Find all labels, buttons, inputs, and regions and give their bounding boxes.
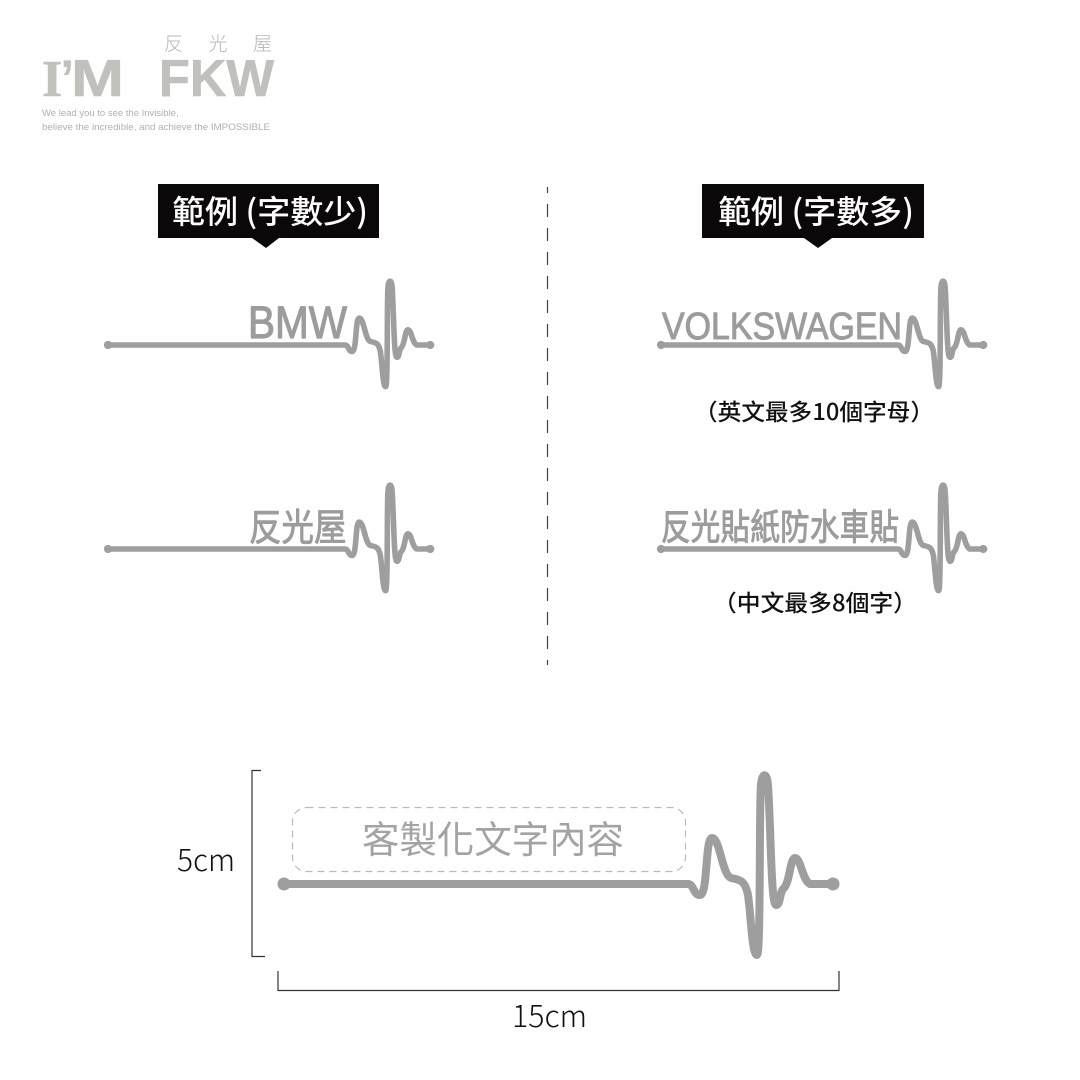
heading tag: many characters — [702, 184, 924, 248]
custom text 反光貼紙防水車貼: 反光貼紙防水車貼 — [661, 499, 899, 550]
logo wordmark FKW: FKW — [159, 50, 275, 108]
custom text placeholder: 客製化文字內容 — [362, 809, 624, 864]
center dashed divider — [546, 187, 548, 665]
custom text VOLKSWAGEN: VOLKSWAGEN — [662, 306, 902, 348]
heartbeat line — [104, 281, 434, 387]
example sticker: BMW — [104, 281, 434, 387]
heartbeat line — [657, 485, 987, 591]
width bracket — [278, 971, 839, 990]
large heartbeat line — [278, 775, 840, 955]
height bracket — [252, 770, 265, 956]
example sticker: 反光貼紙防水車貼 — [657, 485, 987, 591]
height label 5cm: 5cm — [177, 836, 235, 880]
logo letter I: I — [42, 51, 62, 108]
caption: English limit: （英文最多10個字母） — [694, 393, 934, 427]
heading tag: few characters: 範例 (字數少) — [172, 187, 368, 233]
size diagram — [177, 770, 840, 1036]
logo tagline: believe the incredible, and achieve the IMPOSSIBLE — [42, 122, 270, 133]
custom text BMW: BMW — [248, 297, 347, 348]
custom text 反光屋: 反光屋 — [249, 498, 346, 552]
logo: I'M FKW — [42, 29, 298, 133]
dashed text area — [292, 808, 686, 872]
width label 15cm: 15cm — [512, 992, 587, 1036]
logo chinese name: 反光屋 — [164, 29, 298, 56]
logo tagline: We lead you to see the Invisible, — [42, 108, 179, 119]
caption: Chinese limit: （中文最多8個字） — [713, 584, 917, 618]
example sticker: 反光屋 — [104, 485, 434, 591]
heading tag: many characters: 範例 (字數多) — [718, 187, 914, 233]
heading tag: few characters — [158, 184, 379, 248]
example sticker: VOLKSWAGEN — [657, 281, 987, 387]
logo letter M: M — [71, 50, 124, 108]
heartbeat line — [657, 281, 987, 387]
logo apostrophe: ’ — [60, 50, 74, 108]
heartbeat line — [104, 485, 434, 591]
